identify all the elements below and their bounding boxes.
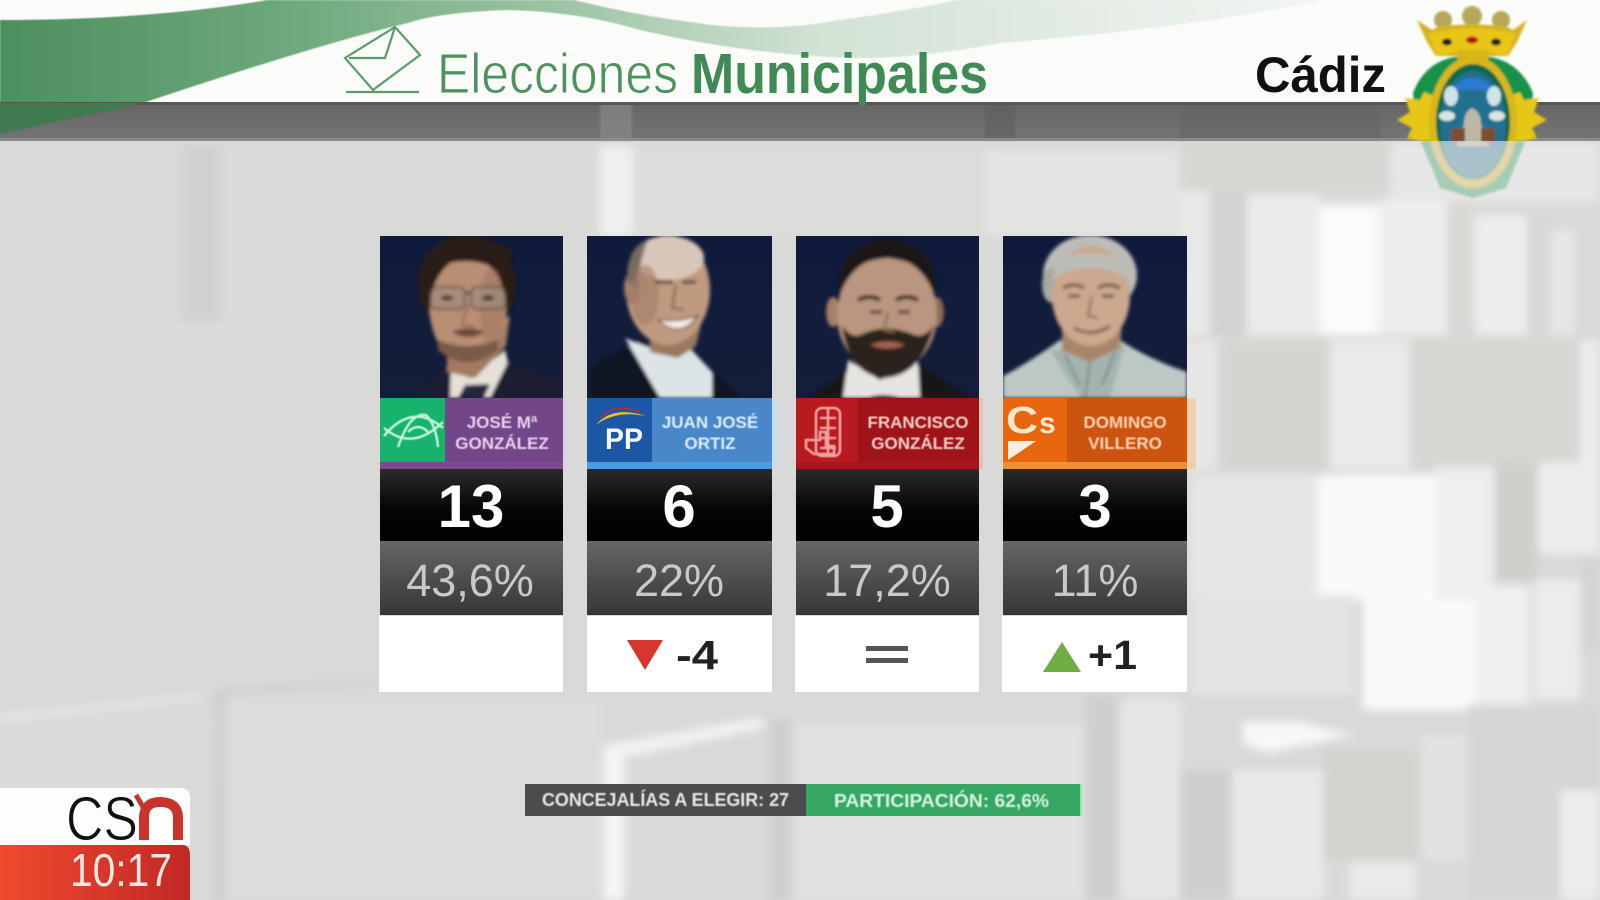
name label <box>796 398 979 469</box>
icon: PP logo <box>596 408 646 456</box>
change <box>587 616 772 692</box>
change <box>795 616 979 692</box>
change <box>1002 616 1187 692</box>
seats <box>1003 469 1187 541</box>
icon: PP logo: PP <box>605 423 643 456</box>
panel: candidate Juan José Ortiz: ORTIZ <box>684 434 736 453</box>
title: Elecciones <box>437 42 678 106</box>
channel logo and clock: 10:17 <box>70 844 172 896</box>
band <box>0 103 1600 141</box>
panel: candidate Francisco González: 5 <box>870 473 904 540</box>
photo <box>587 235 772 398</box>
icon: Adelante Andalucía logo <box>384 415 443 447</box>
panel: candidate Juan José Ortiz: 22% <box>634 555 724 606</box>
icon: Ciudadanos logo <box>1006 400 1056 460</box>
place name: Cádiz <box>1255 47 1386 103</box>
icon: ballot envelope <box>345 27 420 92</box>
title: Municipales <box>691 42 988 106</box>
icon: Cádiz coat of arms <box>1397 6 1547 198</box>
header: white band with green swoosh <box>0 0 1600 141</box>
change (empty) <box>379 616 563 692</box>
panel: candidate Juan José Ortiz: 6 <box>662 473 696 540</box>
panel: candidate Juan José Ortiz: -4 <box>676 632 718 678</box>
panel: candidate Domingo Villero: VILLERO <box>1088 434 1162 453</box>
panel: candidate José Mª González: GONZÁLEZ <box>455 434 549 453</box>
vote share <box>796 541 979 615</box>
panel: candidate Domingo Villero: +1 <box>1088 632 1137 678</box>
icon: Ciudadanos logo: C <box>1006 400 1038 442</box>
panel: candidate Juan José Ortiz: JUAN JOSÉ <box>662 413 758 432</box>
vote share <box>1003 541 1187 615</box>
channel logo and clock <box>0 785 190 900</box>
panel: candidate Domingo Villero <box>1002 235 1196 692</box>
vote share <box>587 541 772 615</box>
panel: candidate Francisco González: GONZÁLEZ <box>871 434 965 453</box>
panel: candidate Juan José Ortiz <box>587 235 777 692</box>
name label <box>380 398 563 469</box>
icon: equal sign <box>866 646 908 663</box>
icon: PSOE logo <box>806 408 840 456</box>
panel: candidate Francisco González: 17,2% <box>823 555 951 606</box>
name label <box>1003 398 1187 469</box>
panel: candidate Domingo Villero: 3 <box>1078 473 1112 540</box>
panel: candidate Francisco González <box>795 236 983 692</box>
seats <box>796 469 979 541</box>
name label <box>587 398 772 469</box>
panel: candidate Francisco González: FRANCISCO <box>867 413 969 432</box>
panel: candidate Domingo Villero: DOMINGO <box>1083 413 1167 432</box>
panel: candidate Domingo Villero: 11% <box>1052 555 1138 606</box>
title <box>437 42 988 106</box>
footer bar: councillors and turnout: PARTICIPACIÓN: 62,6% <box>834 790 1049 811</box>
photo <box>1003 235 1187 398</box>
panel: candidate José Mª González <box>379 235 566 692</box>
photo <box>796 236 979 398</box>
channel logo and clock: CS <box>66 785 138 854</box>
vote share <box>380 541 563 615</box>
icon: up arrow <box>1043 642 1081 672</box>
icon: n mark <box>144 802 178 840</box>
photo <box>380 235 563 398</box>
icon: Ciudadanos logo: s <box>1039 407 1056 440</box>
icon: down arrow <box>627 640 663 670</box>
panel: candidate José Mª González: JOSÉ Mª <box>467 413 538 432</box>
seats <box>380 469 563 541</box>
footer bar: councillors and turnout <box>525 784 1082 816</box>
seats <box>587 469 772 541</box>
footer bar: councillors and turnout: CONCEJALÍAS A ELEGIR: 27 <box>542 789 789 810</box>
panel: candidate José Mª González: 13 <box>438 473 504 540</box>
panel: candidate José Mª González: 43,6% <box>406 555 534 606</box>
